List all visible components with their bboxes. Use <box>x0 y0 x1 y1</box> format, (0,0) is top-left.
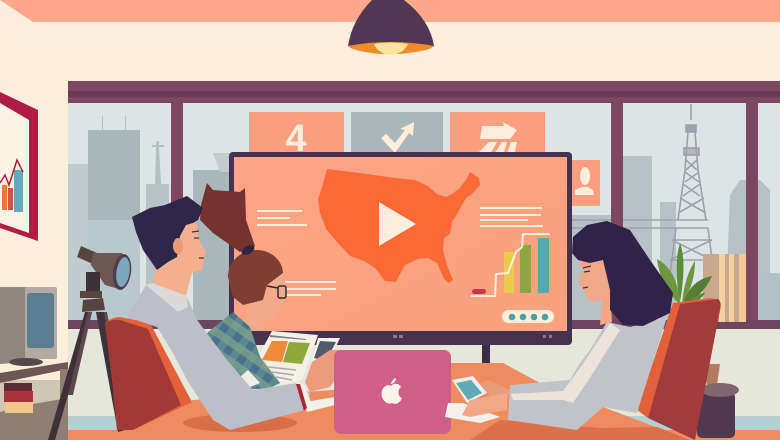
panel: arrows <box>450 112 545 156</box>
phone <box>452 376 487 403</box>
side table with pot <box>697 364 739 438</box>
table shadow right <box>470 420 690 440</box>
panel: rising arrow <box>351 112 443 156</box>
neck and face <box>153 215 206 299</box>
shirt <box>508 317 667 430</box>
lower hand <box>462 393 507 417</box>
ceiling <box>0 0 780 22</box>
framed chart on wall <box>0 92 38 241</box>
tablet under right hands <box>445 403 500 423</box>
eye and mouth <box>583 266 591 288</box>
shirt highlight <box>511 323 620 403</box>
radio tower <box>572 104 716 290</box>
right chair <box>637 298 721 440</box>
collar <box>146 283 188 312</box>
CRT monitor <box>0 287 57 366</box>
upper hand <box>478 380 510 400</box>
hair <box>132 196 203 270</box>
woman with plaid shirt <box>200 183 286 390</box>
head <box>228 250 283 305</box>
screen <box>234 157 567 331</box>
phone in man's hand <box>312 338 340 363</box>
window <box>68 81 780 329</box>
face and neck <box>245 273 286 330</box>
text lines right <box>480 207 543 227</box>
woman at right <box>452 221 673 430</box>
books on shelf <box>4 383 33 413</box>
US map <box>318 169 480 283</box>
bar chart <box>471 234 550 296</box>
left chair <box>105 317 192 430</box>
TV <box>229 152 572 345</box>
cuff <box>296 382 311 411</box>
text lines centre <box>285 281 336 296</box>
lamp <box>348 0 434 55</box>
TV stand <box>482 344 490 374</box>
TV buttons <box>393 335 552 338</box>
hair tie <box>240 243 256 257</box>
eye and brow <box>192 231 204 258</box>
table <box>57 363 690 440</box>
window frame top <box>68 81 780 103</box>
man <box>127 196 340 430</box>
apple logo <box>382 378 402 404</box>
ear <box>173 238 183 254</box>
shelf unit <box>0 362 68 440</box>
lower wall <box>68 329 780 416</box>
books by the window <box>703 254 746 322</box>
small device on table <box>305 397 335 412</box>
mullions <box>171 103 183 323</box>
baseboard <box>68 416 780 432</box>
city skyline <box>68 116 780 324</box>
table shadow left <box>183 414 297 432</box>
glasses <box>267 286 286 298</box>
text lines left <box>257 210 307 226</box>
paper under arm <box>233 370 260 391</box>
pagination pill <box>502 310 554 323</box>
hair <box>572 221 673 326</box>
plant <box>657 243 712 305</box>
tripod camera <box>48 246 133 440</box>
shirt <box>127 283 310 430</box>
floor <box>0 430 780 440</box>
ponytail <box>200 183 255 252</box>
window sill <box>68 320 780 329</box>
plaid shirt <box>207 312 280 390</box>
laptop <box>334 350 451 434</box>
neck and face <box>578 258 612 325</box>
panel: person icon <box>572 160 600 206</box>
play button <box>379 202 416 246</box>
panel: number 4 <box>249 112 344 160</box>
tablet <box>260 331 318 385</box>
hand <box>305 350 340 392</box>
panel: number 4: 4 <box>285 118 307 160</box>
